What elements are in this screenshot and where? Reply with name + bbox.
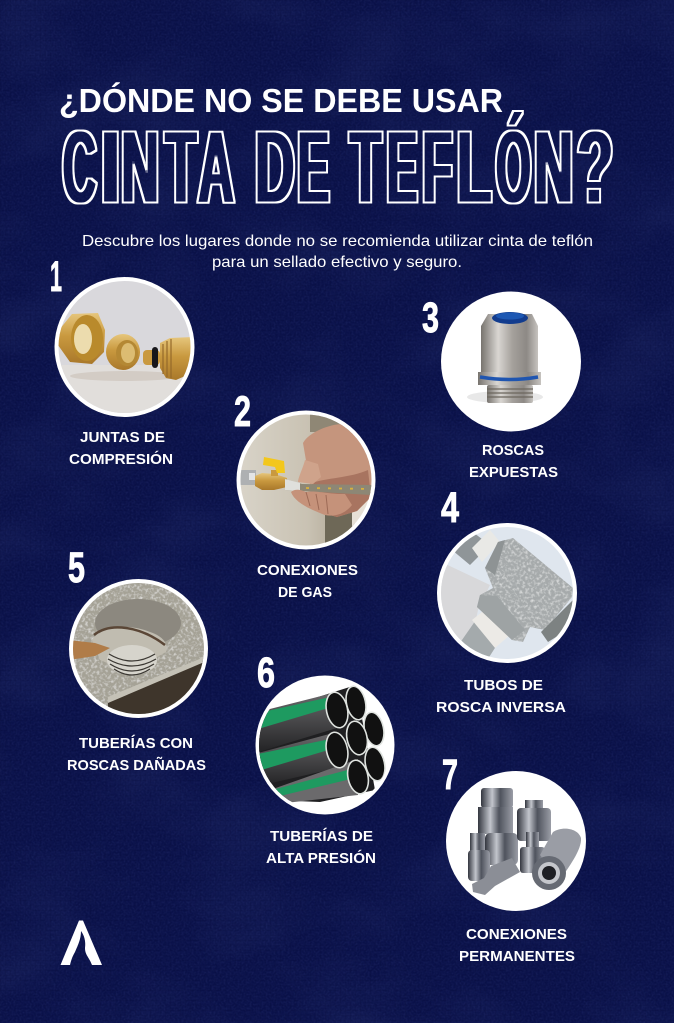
title: CINTA DE TEFLÓN? outlined: F bbox=[422, 110, 452, 226]
label: CONEXIONES bbox=[466, 926, 567, 943]
number 2: 2 bbox=[234, 388, 251, 436]
title: CINTA DE TEFLÓN? outlined: N bbox=[121, 110, 159, 225]
number 4: 4 bbox=[441, 484, 459, 532]
item 5: tuberías con roscas dañadas bbox=[67, 544, 209, 774]
label bbox=[459, 926, 575, 965]
label: EXPUESTAS bbox=[469, 464, 558, 481]
label: TUBERÍAS CON bbox=[79, 735, 193, 752]
icon: brand logo bbox=[60, 920, 102, 965]
label bbox=[257, 562, 358, 601]
title: CINTA DE TEFLÓN? outlined: E bbox=[387, 109, 417, 224]
title: CINTA DE TEFLÓN? outlined: N bbox=[534, 111, 573, 225]
item 2: conexiones de gas bbox=[234, 388, 378, 601]
label: DE GAS bbox=[278, 584, 332, 601]
photo: steel threaded connector bbox=[441, 292, 581, 432]
title: CINTA DE TEFLÓN? outlined: ? bbox=[577, 109, 613, 225]
item 7: conexiones permanentes bbox=[442, 751, 586, 965]
title: CINTA DE TEFLÓN? outlined: T bbox=[350, 110, 381, 225]
item 4: tubos de rosca inversa bbox=[436, 484, 577, 716]
label: JUNTAS DE bbox=[80, 429, 165, 446]
title: CINTA DE TEFLÓN? outlined: L bbox=[457, 110, 492, 225]
label: ROSCAS bbox=[482, 442, 544, 459]
label bbox=[67, 735, 206, 774]
label: COMPRESIÓN bbox=[69, 450, 173, 468]
label: TUBOS DE bbox=[464, 677, 543, 694]
photo: chrome hydraulic fittings bbox=[446, 771, 586, 911]
number 6: 6 bbox=[257, 649, 275, 697]
title: CINTA DE TEFLÓN? outlined: I bbox=[100, 109, 121, 224]
title: CINTA DE TEFLÓN? outlined: Ó bbox=[496, 109, 531, 225]
title: CINTA DE TEFLÓN? outlined bbox=[63, 109, 613, 226]
label bbox=[69, 429, 173, 468]
label bbox=[266, 828, 376, 867]
title: CINTA DE TEFLÓN? outlined: T bbox=[165, 110, 196, 225]
label: ROSCA INVERSA bbox=[436, 699, 566, 716]
photo: hand holding gas valve bbox=[236, 410, 378, 550]
label: CONEXIONES bbox=[257, 562, 358, 579]
title: CINTA DE TEFLÓN? outlined: A bbox=[198, 111, 234, 225]
heading line: ¿DÓNDE NO SE DEBE USAR: ¿DÓNDE NO SE DEBE USAR bbox=[59, 82, 503, 119]
photo: bundle of green striped pipes bbox=[255, 676, 394, 814]
number 1: 1 bbox=[50, 253, 62, 301]
label bbox=[469, 442, 558, 481]
intro text: para un sellado efectivo y seguro. bbox=[212, 254, 462, 271]
intro text bbox=[82, 233, 593, 271]
item 6: tuberías de alta presión bbox=[255, 649, 394, 867]
photo: galvanized tee with thread tape bbox=[437, 523, 577, 663]
label: PERMANENTES bbox=[459, 948, 575, 965]
photo: brass compression fitting bbox=[54, 277, 195, 417]
label: ROSCAS DAÑADAS bbox=[67, 756, 206, 774]
number 7: 7 bbox=[442, 751, 458, 799]
title: CINTA DE TEFLÓN? outlined: C bbox=[63, 110, 96, 224]
photo: damaged thread hole bbox=[69, 579, 209, 720]
label: TUBERÍAS DE bbox=[270, 828, 373, 845]
number 3: 3 bbox=[422, 294, 439, 342]
title: CINTA DE TEFLÓN? outlined: D bbox=[255, 110, 294, 225]
intro text: Descubre los lugares donde no se recomienda utilizar cinta de teflón bbox=[82, 233, 593, 250]
number 5: 5 bbox=[68, 544, 85, 592]
item 3: roscas expuestas bbox=[422, 292, 581, 481]
title: CINTA DE TEFLÓN? outlined: E bbox=[298, 109, 329, 224]
label: ALTA PRESIÓN bbox=[266, 849, 376, 867]
label bbox=[436, 677, 566, 716]
item 1: juntas de compresión bbox=[50, 253, 195, 468]
